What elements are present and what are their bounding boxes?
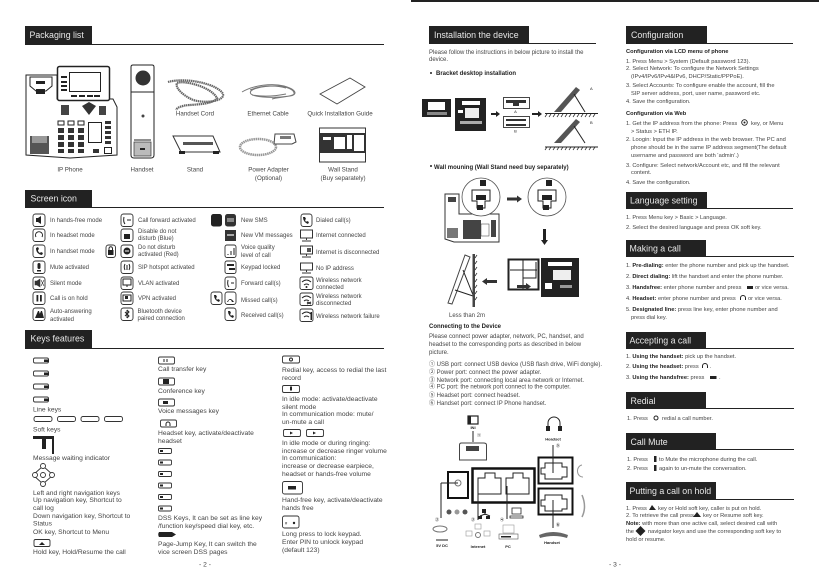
panel: keys column 3: Redial key, access to redial the last	[282, 367, 386, 374]
text: making a call steps: press dial key.	[631, 315, 667, 321]
heading: Screen icon: Screen icon	[30, 194, 77, 204]
labels: (Buy separately)	[320, 175, 366, 182]
bottom devices: Internet	[471, 544, 486, 549]
panel: keys column 1: Soft keys	[33, 426, 61, 434]
text: connecting to the device: picture.	[429, 350, 449, 356]
text: accepting a call steps: 2. Using the headset: press	[626, 364, 699, 370]
text: connecting to the device: Please connect power adapter, network, PC, handset, and	[429, 334, 584, 340]
panel: keys column 3: In idle mode or during ringing:	[282, 440, 371, 447]
panel: screen icons	[33, 214, 380, 323]
label: less than 2m: Less than 2m	[449, 313, 485, 319]
panel: keys column 1: OK key, Shortcut to Menu	[33, 529, 109, 536]
bottom devices: ⑥	[556, 521, 560, 527]
text: configuration instructions: (IPv4/IPv6/IPv4&IPv6, DHCP/Static/PPPoE).	[631, 74, 744, 80]
labels: (Optional)	[255, 175, 282, 182]
icon: hold key	[34, 540, 50, 546]
icon: wall stand	[320, 128, 366, 162]
text: configuration instructions: 2. Loogin: Input the IP address in the web browser. The PC and	[626, 137, 786, 143]
text: configuration instructions: Configuration via LCD menu of phone	[626, 49, 728, 55]
screen icon labels: Silent mode	[50, 281, 82, 287]
text: accepting a call steps: 3. Using the handsfree: press	[626, 375, 705, 381]
text: configuration instructions: username and password are both ‘admin’.)	[631, 153, 739, 159]
heading: Installation the device	[429, 26, 596, 44]
icon: stand	[173, 136, 220, 154]
panel: keys column 1: Line keys	[33, 406, 62, 414]
text: configuration instructions: 4. Save the configuration.	[626, 180, 691, 186]
text: configuration instructions: phone should be in the same IP address segment(The default	[631, 145, 787, 151]
text: connecting to the device: ③ Network port: connecting local area network or Internet.	[429, 376, 584, 384]
icon: voice messages key	[158, 399, 174, 406]
screen icon labels: Wireless network	[316, 294, 363, 300]
text: making a call steps: 5. Designated line: press line key, enter phone number and	[626, 307, 778, 313]
panel: keys column 1: Hold key, Hold/Resume the call	[33, 549, 126, 556]
text: installation intro: Please follow the instructions in below picture to install the	[429, 50, 584, 56]
screen icon labels: Internet is disconnected	[316, 250, 379, 256]
bottom devices: PC	[505, 544, 511, 549]
text: call mute steps: 1. Press	[627, 457, 648, 463]
text: call mute steps: to Mute the microphone during the call.	[659, 457, 758, 463]
text: configuration instructions: 1. Press Menu > System (Default password 123).	[626, 59, 750, 65]
text: connecting to the device	[429, 324, 602, 407]
heading: Putting a call on hold	[626, 482, 794, 500]
screen icon labels: Missed call(s)	[241, 298, 278, 304]
USB stick and port: ①	[477, 432, 481, 438]
icons: soft keys	[34, 416, 122, 422]
panel: keys column 2: headset	[158, 438, 182, 445]
text: redial step: redial a call number.	[662, 416, 713, 422]
text: connecting to the device: Connecting to the Device	[429, 324, 502, 330]
labels: Handset	[130, 166, 154, 174]
heading: Call Mute	[626, 433, 794, 450]
icon: page-jump key	[158, 532, 176, 537]
text: installation intro: device.	[429, 57, 448, 63]
panel: keys column 3: Long press to lock keypad.	[282, 531, 362, 538]
text: redial step	[627, 416, 713, 422]
text: making a call steps: or vice versa.	[748, 296, 782, 302]
screen icon labels: Keypad locked	[241, 265, 280, 271]
icon: handset	[131, 65, 154, 158]
icons: column 3	[211, 214, 236, 320]
adapter and network icons: ④	[500, 516, 504, 522]
headset	[545, 417, 562, 448]
text: configuration instructions: content.	[631, 170, 652, 176]
icon: lock key: #	[285, 520, 288, 526]
diagram: bracket desktop installation: A	[590, 86, 593, 91]
text: configuration instructions: 2. Select Network: To configure the Network Settings	[626, 66, 759, 72]
screen icon labels: Wireless network	[316, 278, 363, 284]
labels: Ethernet Cable	[247, 110, 289, 118]
adapter and network icons: ③	[471, 516, 475, 522]
icon: handset cord	[168, 80, 223, 110]
screen icon labels: Internet connected	[316, 233, 366, 239]
heading: Language setting	[626, 192, 793, 209]
text: configuration instructions	[626, 49, 787, 186]
screen icon labels: Voice quality	[241, 245, 275, 251]
panel: keys column 3: increase or decrease ringer volume	[282, 448, 387, 455]
diagram: bracket desktop installation	[422, 86, 598, 150]
text: call mute steps: 2. Press	[627, 466, 648, 472]
screen icon labels: Call forward activated	[138, 218, 196, 224]
icon: headset key	[160, 420, 176, 427]
text: hold steps: key or Hold soft key, caller is put on hold.	[658, 506, 762, 512]
heading: Redial: Redial	[630, 396, 655, 406]
icon: transfer key	[158, 357, 174, 364]
labels: Wall Stand	[328, 166, 358, 174]
icons: DSS keys	[158, 448, 172, 511]
heading: Installation the device: Installation the device	[434, 30, 519, 40]
icon: mute key	[282, 386, 300, 392]
panel: packaging items	[26, 65, 373, 182]
heading: Packaging list: Packaging list	[30, 30, 84, 40]
screen icon labels: SIP hotspot activated	[138, 265, 195, 271]
heading: Configuration: Configuration	[631, 30, 683, 40]
icon: volume keys	[284, 430, 324, 436]
panel: keys column 1: Up navigation key, Shortcut to	[33, 497, 122, 504]
text: accepting a call steps: .	[719, 375, 721, 381]
panel: keys column 3: (default 123)	[282, 547, 320, 554]
labels: Quick Installation Guide	[307, 110, 373, 118]
screen icon labels: level of call	[241, 253, 271, 259]
heading: Making a call	[626, 240, 794, 257]
panel: keys column 1: call log	[33, 505, 54, 512]
panel: keys column 3: un-mute a call	[282, 419, 325, 426]
panel: keys column 3: headset or hands-free volume	[282, 471, 371, 478]
panel: keys column 3: In idle mode: activate/deactivate	[282, 396, 378, 403]
heading: Screen icon	[25, 190, 384, 208]
text: call mute steps: again to un-mute the conversation.	[659, 466, 747, 472]
icon: quick installation guide	[320, 78, 365, 104]
text: configuration instructions: 4. Save the configuration.	[626, 99, 691, 105]
text: making a call steps: 3. Handsfree: enter phone number and press	[626, 285, 742, 291]
labels: Power Adapter	[248, 166, 289, 174]
diagram: bracket desktop installation: B	[514, 128, 517, 134]
page number 3: - 3 -	[609, 562, 621, 568]
screen icon labels	[50, 218, 380, 323]
panel: keys column 3: In communication mode: mute/	[282, 411, 374, 418]
screen icon labels: In headset mode	[50, 233, 95, 239]
labels	[57, 110, 373, 182]
icon: message waiting indicator	[33, 436, 54, 454]
icons: column 4	[300, 214, 313, 322]
heading: Accepting a call: Accepting a call	[630, 336, 691, 346]
panel: keys column 3	[282, 356, 387, 554]
diagram: bracket desktop installation: A	[514, 109, 517, 114]
screen icon labels: In handset mode	[50, 249, 95, 255]
network and PC ports	[472, 468, 534, 520]
headset: Headset	[545, 436, 561, 442]
text: connecting to the device: ④ PC port: the network port connect to the computer.	[429, 382, 571, 390]
screen icon labels: Wireless network failure	[316, 314, 380, 320]
page number 2: - 2 -	[199, 562, 211, 568]
panel: keys column 1: Down navigation key, Shortcut to	[33, 513, 131, 520]
panel: keys column 3: record	[282, 375, 301, 382]
text: configuration instructions: 3. Select Accounts: To configure enable the account, fill the	[626, 83, 774, 89]
text: hold steps	[626, 505, 781, 543]
diagram: bracket desktop installation: B	[590, 120, 593, 125]
labels: IP Phone	[57, 166, 83, 174]
panel: keys column 1: Message waiting indicator	[33, 455, 111, 462]
screen icon labels: Mute activated	[50, 265, 89, 271]
panel: keys column 1: Status	[33, 520, 53, 528]
icons: column 2	[121, 214, 133, 320]
text: configuration instructions: SIP server address, port, user name, password etc.	[631, 91, 761, 97]
screen icon labels: In hands-free mode	[50, 218, 103, 224]
heading: Call Mute: Call Mute	[630, 437, 668, 447]
heading: Accepting a call	[626, 332, 794, 349]
panel: keys column 2: /function key/speed dial key, etc.	[158, 523, 254, 530]
text: hold steps: Note: with more than one active call, select desired call with	[626, 521, 777, 527]
screen icon labels: Call is on hold	[50, 296, 88, 302]
icon: IP phone	[26, 66, 117, 158]
panel: keys column 3: hands free	[282, 505, 314, 512]
heading: Putting a call on hold: Putting a call on hold	[630, 486, 711, 496]
icon: power adapter	[240, 134, 296, 155]
text: hold steps: the	[626, 529, 634, 535]
screen icon labels: activated (Red)	[138, 252, 179, 258]
panel: keys column 3: silent mode	[282, 404, 316, 411]
bottom devices	[433, 521, 568, 549]
labels: Stand	[187, 166, 204, 174]
screen icon labels: disturb (Blue)	[138, 236, 174, 242]
icon: redial key	[282, 356, 300, 363]
text: making a call steps: 2. Direct dialing: lift the handset and enter the phone number.	[626, 274, 784, 280]
labels: Handset Cord	[176, 110, 215, 118]
icons: line keys	[34, 358, 49, 402]
screen icon labels: Forward call(s)	[241, 281, 281, 287]
bottom devices: Handset	[544, 540, 561, 545]
text: configuration instructions: 1. Get the IP address from the phone: Press	[626, 121, 737, 127]
panel: keys column 2: Page-Jump Key, It can switch the	[158, 541, 257, 548]
icon: lock key	[282, 516, 299, 528]
text: accepting a call steps: .	[710, 364, 712, 370]
heading: Making a call: Making a call	[630, 244, 681, 254]
text: making a call steps: or vice versa.	[755, 285, 789, 291]
text: configuration instructions: > Status > ETH IP.	[631, 129, 678, 135]
heading: Packaging list	[25, 26, 384, 45]
heading: Language setting: Language setting	[630, 196, 698, 206]
text: hold steps: 1. Press	[626, 506, 647, 512]
panel: keys column 3: Enter PIN to unlock keypad	[282, 539, 363, 546]
USB stick and port	[460, 416, 486, 460]
diagram: device connections	[433, 416, 584, 549]
text: call mute steps	[627, 456, 758, 472]
panel: keys column 2: Call transfer key	[158, 366, 207, 373]
text: hold steps: 2. To retrieve the call press	[626, 513, 694, 519]
subheading: wall mounting: Wall mouning (Wall Stand need buy separately)	[434, 165, 569, 171]
panel: keys column 2	[158, 357, 263, 556]
USB stick and port: INI	[470, 425, 476, 430]
text: language steps	[626, 215, 762, 231]
diagram: wall mounting	[445, 178, 579, 307]
screen icon labels: VLAN activated	[138, 281, 179, 287]
screen icon labels: disconnected	[316, 301, 351, 307]
icon: hands-free key	[282, 482, 302, 494]
heading: Keys features	[25, 330, 384, 349]
text: language steps: 1. Press Menu key > Basic > Language.	[626, 215, 727, 221]
text: hold steps: navigator keys and use the corresponding soft key to	[648, 529, 781, 535]
text: connecting to the device: ② Power port: connect the power adapter.	[429, 368, 542, 376]
panel: keys column 2: vice screen DSS pages	[158, 549, 228, 556]
screen icon labels: Bluetooth device	[138, 309, 183, 315]
heading: Redial	[626, 392, 794, 409]
text: installation intro	[429, 50, 584, 63]
panel: keys column 3: increase or decrease earpiece,	[282, 463, 374, 470]
text: making a call steps: 4. Headset: enter phone number and press	[626, 296, 736, 302]
heading: Configuration	[626, 26, 793, 44]
screen icon labels: New VM messages	[241, 233, 293, 239]
heading: Keys features: Keys features	[30, 334, 85, 344]
screen icon labels: VPN activated	[138, 296, 176, 302]
screen icon labels: New SMS	[241, 218, 268, 224]
icon: ethernet cable	[242, 85, 295, 99]
screen icon labels: paired connection	[138, 316, 185, 322]
text: making a call steps	[626, 263, 790, 321]
text: hold steps: key or Resume soft key.	[703, 513, 764, 519]
screen icon labels: activated	[50, 317, 74, 323]
text: accepting a call steps: 1. Using the handset: pick up the handset.	[626, 354, 736, 360]
panel: keys column 3: Hand-free key, activate/deactivate	[282, 497, 383, 504]
icon: conference key	[158, 378, 174, 385]
icons: column 1	[33, 214, 116, 320]
screen icon labels: No IP address	[316, 266, 354, 272]
screen icon labels: Dialed call(s)	[316, 218, 351, 224]
power port box	[441, 472, 468, 518]
text: language steps: 2. Select the desired language and press OK soft key.	[626, 225, 762, 231]
adapter and network icons	[435, 508, 523, 522]
screen icon labels: Received call(s)	[241, 313, 284, 319]
text: connecting to the device: ① USB port: connect USB device (USB flash drive, WiFi dongle).	[429, 360, 602, 368]
text: making a call steps: 1. Pre-dialing: enter the phone number and pick up the handset.	[626, 263, 790, 269]
adapter and network icons: ②	[435, 516, 439, 522]
screen icon labels: Auto-answering	[50, 309, 92, 315]
panel: keys column 2: Headset key, activate/deactivate	[158, 430, 254, 437]
subheading: bracket desktop installation: Bracket desktop installation	[436, 71, 516, 77]
screen icon labels: Disable do not	[138, 229, 177, 235]
screen icon labels: Do not disturb	[138, 245, 176, 251]
panel: keys column 1: Left and right navigation keys	[33, 490, 121, 497]
panel: keys column 2: Conference key	[158, 388, 205, 395]
panel: keys column 1	[32, 358, 131, 556]
text: configuration instructions: Configuration via Web	[626, 111, 687, 117]
panel: keys column 3: In communication:	[282, 455, 336, 462]
text: hold steps: hold or resume.	[626, 537, 666, 543]
handset and headset jacks	[538, 445, 584, 528]
text: configuration instructions: 3. Configure: Select network/Account etc, and fill the relevant	[626, 163, 780, 169]
headset: ⑤	[556, 442, 560, 448]
panel: keys column 2: Voice messages key	[158, 408, 220, 415]
text: connecting to the device: headset to the corresponding ports as described in below	[429, 342, 582, 348]
text: accepting a call steps	[626, 354, 736, 381]
screen icon labels: connected	[316, 285, 344, 291]
text: connecting to the device: ⑥ Handset port: connect IP Phone handset.	[429, 399, 547, 407]
text: configuration instructions: key, or Menu	[751, 121, 783, 127]
text: connecting to the device: ⑤ Headset port: connect headset.	[429, 391, 520, 399]
text: redial step: 1. Press	[627, 416, 648, 422]
panel: keys column 2: DSS Keys, It can be set as line key	[158, 515, 263, 522]
bottom devices: 5V DC	[436, 543, 448, 548]
icon: navigation keys	[32, 464, 54, 486]
